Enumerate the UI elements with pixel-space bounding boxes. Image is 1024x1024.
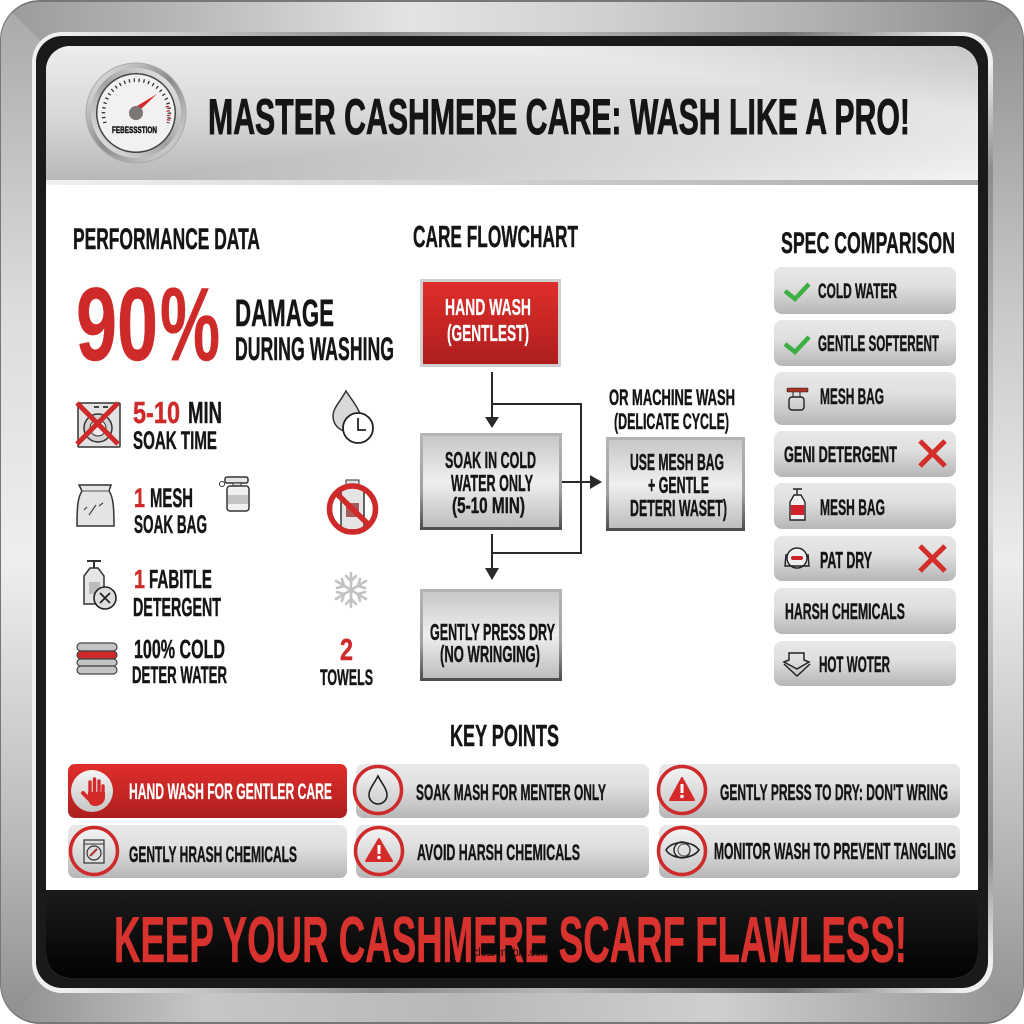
icon: crossed washing machine — [77, 403, 120, 447]
label: machine wash: (DELICATE CYCLE) — [614, 409, 729, 434]
stat: mesh bag: MESH — [150, 483, 193, 513]
icon: snowflake — [336, 573, 366, 607]
icon: stacked towels — [77, 643, 117, 674]
flow step: press dry — [422, 590, 560, 680]
stat: mesh bag: 1 — [134, 483, 145, 513]
stat: mesh bag: SOAK BAG — [134, 511, 207, 539]
spec row: pat dry — [774, 536, 956, 581]
icon: prohibited bottle — [330, 480, 376, 532]
stat: fabitle detergent: DETERGENT — [133, 592, 221, 622]
spec row: gent detergent — [774, 431, 956, 477]
panel: care flowchart — [413, 219, 744, 680]
arrows and connectors — [485, 372, 602, 580]
spec row: mesh bag with bottle: MESH BAG — [820, 495, 885, 520]
heading: key points: KEY POINTS — [450, 718, 559, 753]
spec row: mesh bag: MESH BAG — [820, 384, 884, 409]
stat: 90% damage — [76, 267, 394, 383]
stat: 90% damage: DAMAGE — [235, 293, 334, 335]
flow step: hand wash: HAND WASH — [445, 294, 531, 320]
stat: 90% damage: % — [160, 267, 220, 383]
key point: avoid harsh chemicals: AVOID HARSH CHEMICALS — [417, 840, 580, 865]
flow step: press dry: GENTLY PRESS DRY — [430, 619, 555, 645]
flow step: mesh bag: USE MESH BAG — [630, 449, 724, 475]
stat: cold water: 100% COLD — [134, 634, 225, 664]
flow step: hand wash: (GENTLEST) — [447, 320, 529, 346]
panel: performance data — [73, 223, 394, 690]
flow step: mesh bag — [608, 438, 744, 530]
key point: soak: SOAK MASH FOR MENTER ONLY — [416, 780, 606, 805]
spec row: mesh bag with bottle — [774, 483, 956, 529]
icon: drop and clock — [333, 391, 373, 443]
stat: mesh bag — [134, 483, 207, 539]
flow step: press dry: (NO WRINGING) — [440, 641, 540, 667]
stat: soak time: SOAK TIME — [133, 427, 217, 455]
stat: towels: 2 — [340, 632, 353, 667]
key point: hand wash: HAND WASH FOR GENTLER CARE — [129, 779, 332, 804]
stat: fabitle detergent: FABITLE — [149, 564, 212, 594]
key point: press dry — [658, 764, 960, 818]
stat: cold water — [132, 634, 227, 689]
panel: key points — [68, 718, 960, 878]
spec row: cold water — [774, 267, 956, 314]
flow step: soak: SOAK IN COLD — [445, 447, 536, 473]
icon: detergent bottle — [84, 561, 116, 609]
stat: soak time: 5-10 — [133, 395, 180, 430]
stat: soak time — [133, 395, 222, 455]
spec row: hot water: HOT WOTER — [819, 652, 890, 677]
stat: towels — [320, 632, 373, 690]
spec row: harsh chemicals: HARSH CHEMICALS — [785, 599, 905, 624]
icon: spray bottle — [220, 477, 249, 511]
key point: gently harsh chemicals — [68, 825, 347, 878]
spec row: hot water — [774, 641, 956, 686]
spec row: gent detergent: GENI DETERGENT — [784, 442, 897, 467]
flow step: soak — [422, 434, 560, 528]
heading: performance data: PERFORMANCE DATA — [73, 223, 260, 256]
stat: fabitle detergent — [133, 564, 221, 622]
panel: spec comparison — [774, 227, 956, 686]
stat: soak time: MIN — [188, 395, 222, 430]
watermark: cleaningbio.com — [473, 945, 550, 959]
icon: pressure gauge — [86, 63, 186, 163]
key point: monitor wash — [658, 825, 960, 878]
flow step: soak: (5-10 MIN) — [452, 493, 525, 518]
key point: soak — [354, 764, 649, 818]
stat: towels: TOWELS — [320, 665, 373, 690]
stat: cold water: DETER WATER — [132, 662, 227, 689]
spec row: gentle softerent — [774, 320, 956, 366]
key point: hand wash — [68, 764, 347, 818]
spec row: pat dry: PAT DRY — [820, 547, 872, 573]
flow step: mesh bag: + GENTLE — [648, 472, 709, 498]
stat: 90% damage: 90 — [76, 267, 158, 383]
flow step: soak: WATER ONLY — [451, 470, 533, 496]
label: machine wash — [609, 385, 735, 434]
heading: care flowchart: CARE FLOWCHART — [413, 219, 578, 254]
label: machine wash: OR MACHINE WASH — [609, 385, 735, 410]
icon: mesh bag — [77, 485, 114, 526]
spec row: mesh bag — [774, 372, 956, 425]
spec row: harsh chemicals — [774, 588, 956, 634]
key point: avoid harsh chemicals — [356, 825, 649, 878]
key point: gently harsh chemicals: GENTLY HRASH CHEMICALS — [129, 842, 297, 867]
flow step: hand wash — [422, 280, 560, 366]
spec row: cold water: COLD WATER — [818, 280, 897, 303]
stat: fabitle detergent: 1 — [134, 564, 145, 594]
flow step: mesh bag: DETERI WASET) — [630, 495, 727, 521]
stat: 90% damage: DURING WASHING — [235, 331, 394, 367]
icon: pressure gauge: FEBESSSTION — [112, 125, 157, 135]
